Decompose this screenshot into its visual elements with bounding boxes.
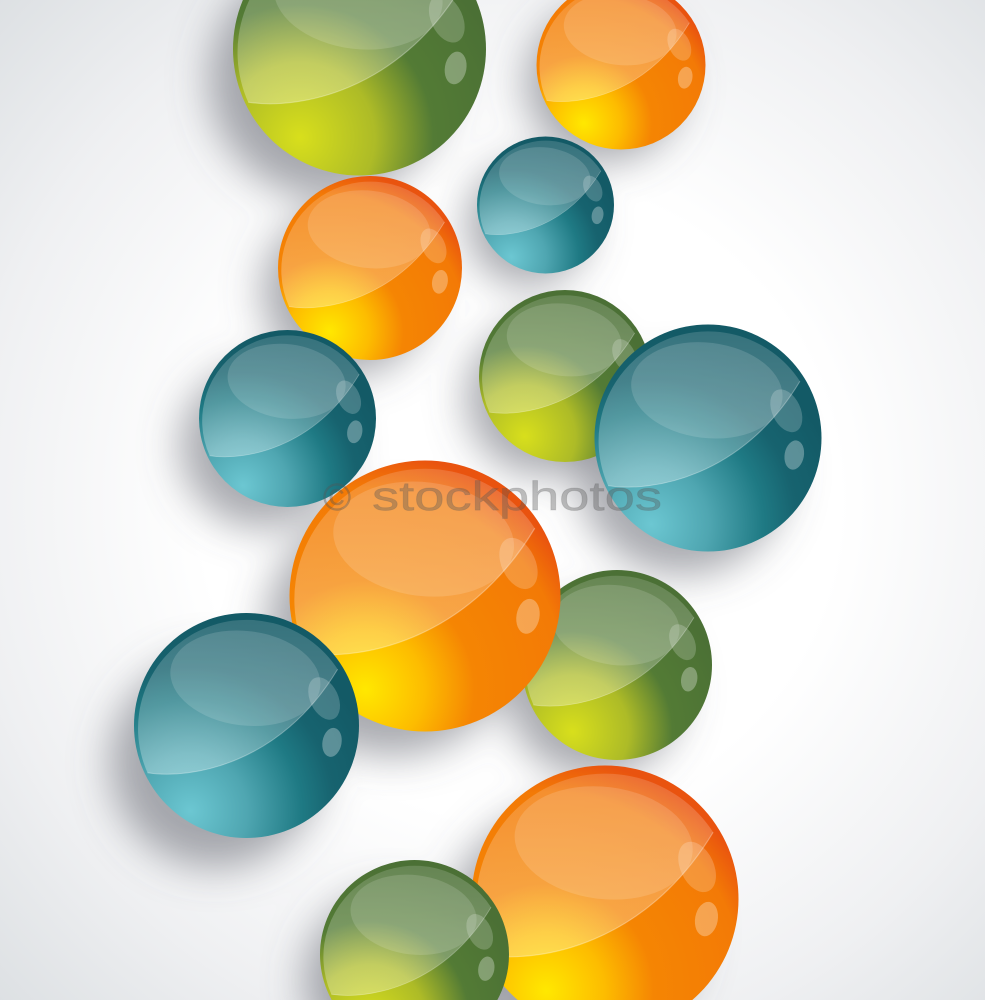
- watermark: ©: [323, 477, 351, 519]
- sphere: small teal: [477, 136, 614, 274]
- sphere: orange upper left: [278, 176, 462, 360]
- sphere: large teal right: [594, 324, 822, 552]
- sphere drop shadows: [110, 0, 787, 1000]
- sphere: green middle: [479, 290, 651, 462]
- sphere: large teal lower left: [134, 613, 359, 838]
- sphere: green bottom: [320, 860, 509, 1000]
- watermark: [323, 473, 662, 519]
- sphere: large orange bottom: [472, 766, 738, 1000]
- sphere: large green top: [233, 0, 486, 176]
- sphere: large orange centre: [290, 460, 560, 732]
- sphere: teal left: [199, 330, 376, 507]
- sphere: orange top right: [536, 0, 706, 149]
- watermark: stockphotos: [372, 473, 662, 519]
- sphere: green lower right: [522, 570, 712, 760]
